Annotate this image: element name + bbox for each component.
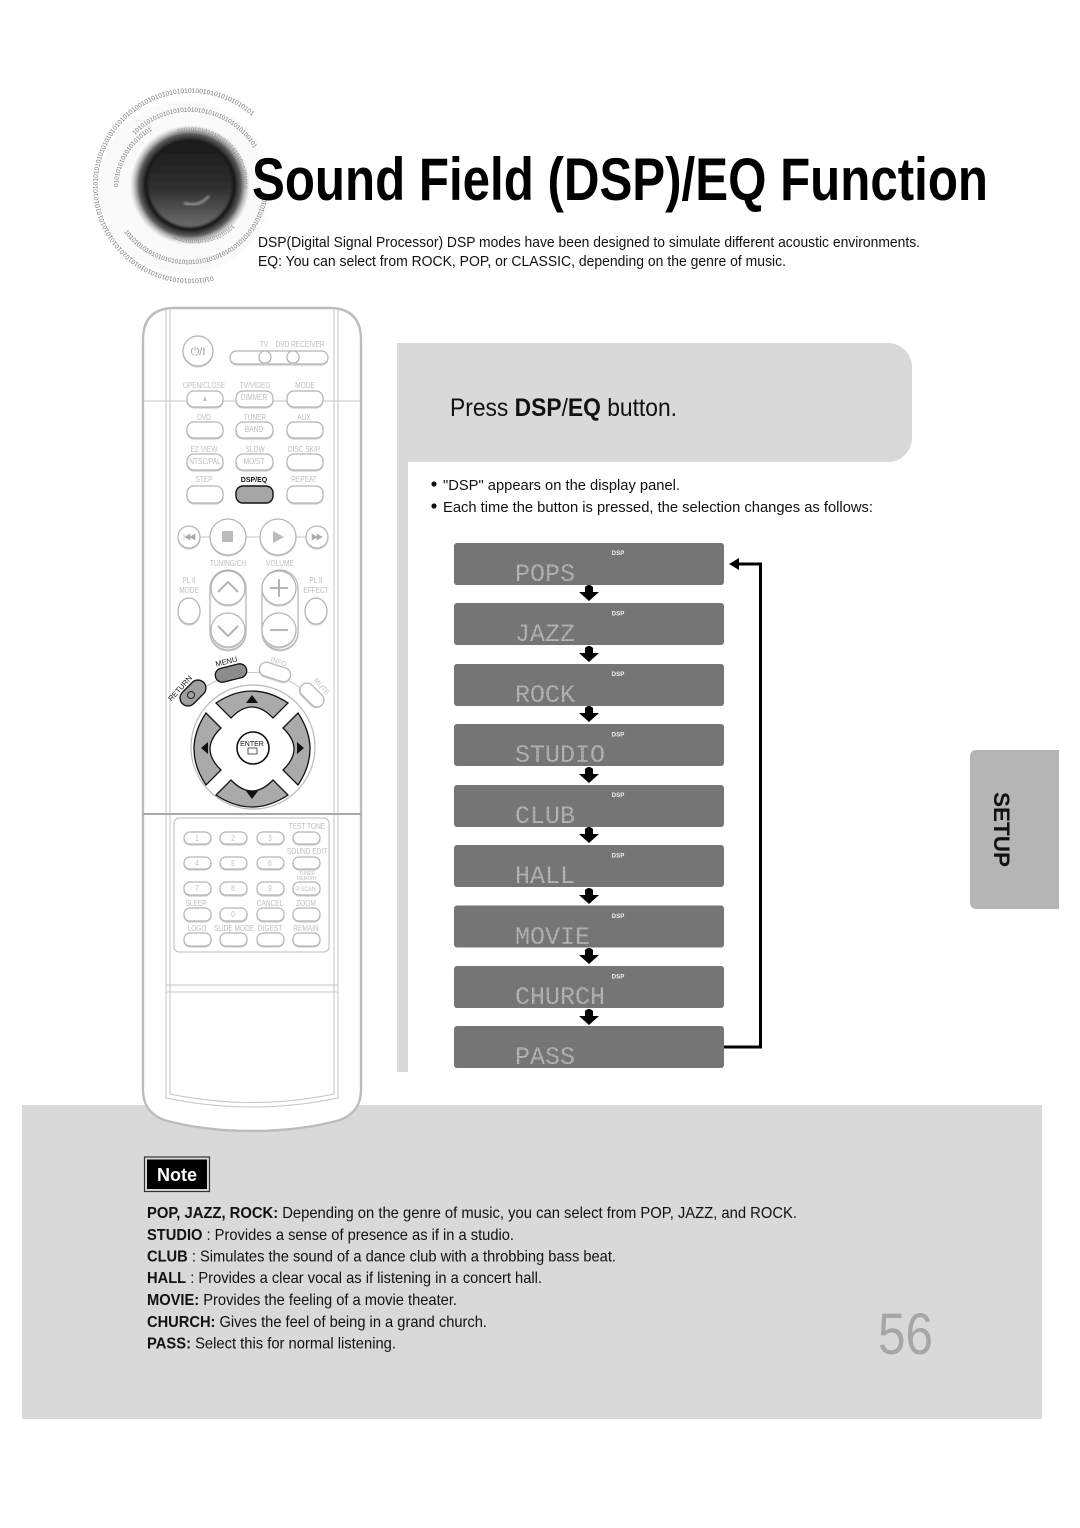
number keypad: LOGO (188, 923, 207, 933)
display sequence (454, 543, 724, 1072)
note text: CHURCH: Gives the feel of being in a grand church. (147, 1314, 487, 1331)
icon: speaker with binary rings: 01010101010101010101010101010101 (178, 127, 248, 188)
note text: MOVIE: Provides the feeling of a movie theater. (147, 1292, 457, 1309)
step heading text: Press DSP/EQ button. (450, 394, 677, 422)
tuning and volume rockers: PL II (182, 575, 196, 585)
number keypad: TEST TONE (289, 821, 325, 831)
note text: STUDIO : Provides a sense of presence as if in a studio. (147, 1227, 514, 1244)
display: MOVIE (454, 906, 724, 952)
number keypad: 7 (195, 883, 199, 893)
top button grid: AUX (297, 412, 311, 422)
display: JAZZ: DSP (612, 610, 624, 618)
navigation d-pad with enter: ENTER (240, 741, 264, 748)
display: CHURCH: CHURCH (515, 983, 605, 1012)
top button grid: MODE (295, 380, 315, 390)
power and TV switch (183, 336, 328, 366)
arrow 1 (579, 585, 599, 601)
bullet list: Each time the button is pressed, the selection changes as follows: (443, 500, 873, 516)
arrow 8 (579, 1009, 599, 1025)
display: PASS: PASS (515, 1043, 575, 1072)
top button grid: DISC SKIP (288, 444, 320, 454)
note text (147, 1205, 797, 1352)
bullet list: "DSP" appears on the display panel. (443, 478, 680, 494)
number keypad: 9 (268, 883, 272, 893)
tuning and volume rockers: MODE (179, 585, 199, 595)
menu, return, info, mute buttons: MUTE (312, 677, 331, 697)
note badge: Note (157, 1165, 197, 1185)
number keypad: MEMORY (297, 876, 318, 882)
note text: PASS: Select this for normal listening. (147, 1336, 396, 1352)
number keypad: CANCEL (257, 898, 283, 908)
number keypad: SLEEP (185, 898, 207, 908)
number keypad: SOUND EDIT (287, 846, 328, 856)
display: HALL: HALL (515, 862, 575, 891)
display: CLUB: DSP (612, 792, 624, 799)
tuning and volume rockers: TUNING/CH (210, 558, 246, 568)
number keypad (174, 818, 329, 952)
top button grid: MO/ST (244, 456, 265, 466)
menu, return, info, mute buttons: INFO (269, 657, 288, 669)
display: ROCK: ROCK (515, 681, 575, 710)
number keypad: 1 (195, 833, 199, 843)
number keypad: 2 (231, 833, 235, 843)
arrow 5 (579, 827, 599, 843)
display: HALL (454, 845, 724, 891)
display: MOVIE: DSP (612, 913, 624, 920)
display: CHURCH (454, 966, 724, 1012)
display: JAZZ (454, 603, 724, 649)
number keypad: 3 (268, 833, 272, 843)
number keypad: 4 (195, 858, 199, 868)
number keypad: 0 (231, 909, 235, 919)
DSP/EQ button highlighted: DSP/EQ (241, 477, 268, 484)
icon: speaker with binary rings: 1010101010101010101010101010 (172, 225, 235, 244)
top button grid: BAND (245, 424, 263, 434)
intro text: EQ: You can select from ROCK, POP, or CLASSIC, depending on the genre of music. (258, 254, 786, 270)
power and TV switch: ⏻/I (191, 346, 205, 358)
top button grid: SLOW (245, 444, 265, 454)
menu, return, info, mute buttons: RETURN (166, 674, 194, 703)
tuning and volume rockers (178, 558, 329, 650)
number keypad: P.SCAN (296, 887, 316, 893)
number keypad: ZOOM (296, 898, 316, 908)
top button grid: ▲ (202, 393, 208, 403)
top button grid: TV/VIDEO (240, 380, 271, 390)
arrow 3 (579, 706, 599, 722)
transport buttons (178, 519, 328, 555)
number keypad: REMAIN (293, 923, 319, 933)
bottom note band (22, 1105, 1042, 1419)
intro text: DSP(Digital Signal Processor) DSP modes have been designed to simulate different acoustic environments. (258, 235, 920, 251)
tuning and volume rockers: VOLUME (266, 558, 294, 568)
top button grid: OPEN/CLOSE (183, 380, 225, 390)
power and TV switch: DVD RECEIVER (275, 339, 325, 349)
number keypad: TUNER (299, 871, 315, 877)
remote inner lines (143, 310, 361, 1107)
panel: remote control (143, 308, 361, 1131)
arrow: loop back to POPS (724, 558, 760, 1047)
note text: CLUB : Simulates the sound of a dance club with a throbbing bass beat. (147, 1248, 616, 1266)
display: POPS: DSP (612, 550, 624, 557)
display: CHURCH: DSP (612, 974, 624, 980)
setup side tab (970, 750, 1059, 909)
display: HALL: DSP (612, 852, 624, 860)
note text: HALL : Provides a clear vocal as if listening in a concert hall. (147, 1270, 542, 1287)
note text: POP, JAZZ, ROCK: Depending on the genre of music, you can select from POP, JAZZ, and ROCK. (147, 1205, 797, 1222)
top button grid: NTSC/PAL (189, 456, 221, 466)
number keypad: SLIDE MODE (214, 923, 254, 933)
note badge (144, 1157, 210, 1192)
top button grid (183, 380, 323, 503)
arrow 2 (579, 646, 599, 662)
panel: step heading (397, 343, 912, 1072)
top button grid: DVD (197, 412, 211, 422)
top button grid: EZ VIEW (191, 444, 218, 454)
display: CLUB: CLUB (515, 802, 575, 831)
page number: 56 (878, 1302, 933, 1367)
power and TV switch: TV (260, 339, 268, 349)
display: STUDIO (454, 724, 724, 770)
arrow 4 (579, 767, 599, 783)
tuning and volume rockers: EFFECT (303, 585, 329, 595)
tuning and volume rockers: PL II (309, 575, 323, 585)
display: POPS (454, 543, 724, 589)
menu, return, info, mute buttons: MENU (215, 655, 238, 669)
display: CLUB (454, 785, 724, 831)
display: STUDIO: DSP (612, 732, 624, 738)
icon: speaker with binary rings (92, 88, 267, 284)
display: ROCK: DSP (612, 671, 624, 678)
display: POPS: POPS (515, 560, 575, 589)
top button grid: DIMMER (241, 392, 267, 402)
display: MOVIE: MOVIE (515, 923, 590, 952)
display: ROCK (454, 664, 724, 710)
DSP/EQ button highlighted (236, 477, 273, 503)
setup side tab: SETUP (989, 792, 1014, 867)
arrow 6 (579, 888, 599, 904)
number keypad: 8 (231, 883, 235, 893)
navigation d-pad with enter (191, 685, 315, 809)
number keypad: 6 (268, 858, 272, 868)
top button grid: TUNER (244, 412, 266, 422)
icon: speaker with binary rings: 0101010101010101010101010101010101010101010101010101010101010101010101001010101010101010010101010101010101010101010101011 (92, 88, 254, 284)
remote body (143, 308, 361, 1131)
intro text (258, 235, 920, 270)
icon: speaker with binary rings: 1010101010101010101010101010101010101010101010101010101010101010101010101010101 (124, 200, 266, 264)
top button grid: REPEAT (291, 474, 317, 484)
number keypad: DIGEST (258, 923, 283, 933)
display: PASS (454, 1026, 724, 1072)
menu, return, info, mute buttons (166, 655, 331, 710)
bullet list (431, 478, 873, 516)
number keypad: 5 (231, 858, 235, 868)
arrow 7 (579, 948, 599, 964)
display: STUDIO: STUDIO (515, 741, 605, 770)
top button grid: STEP (195, 474, 213, 484)
display: JAZZ: JAZZ (515, 620, 575, 649)
